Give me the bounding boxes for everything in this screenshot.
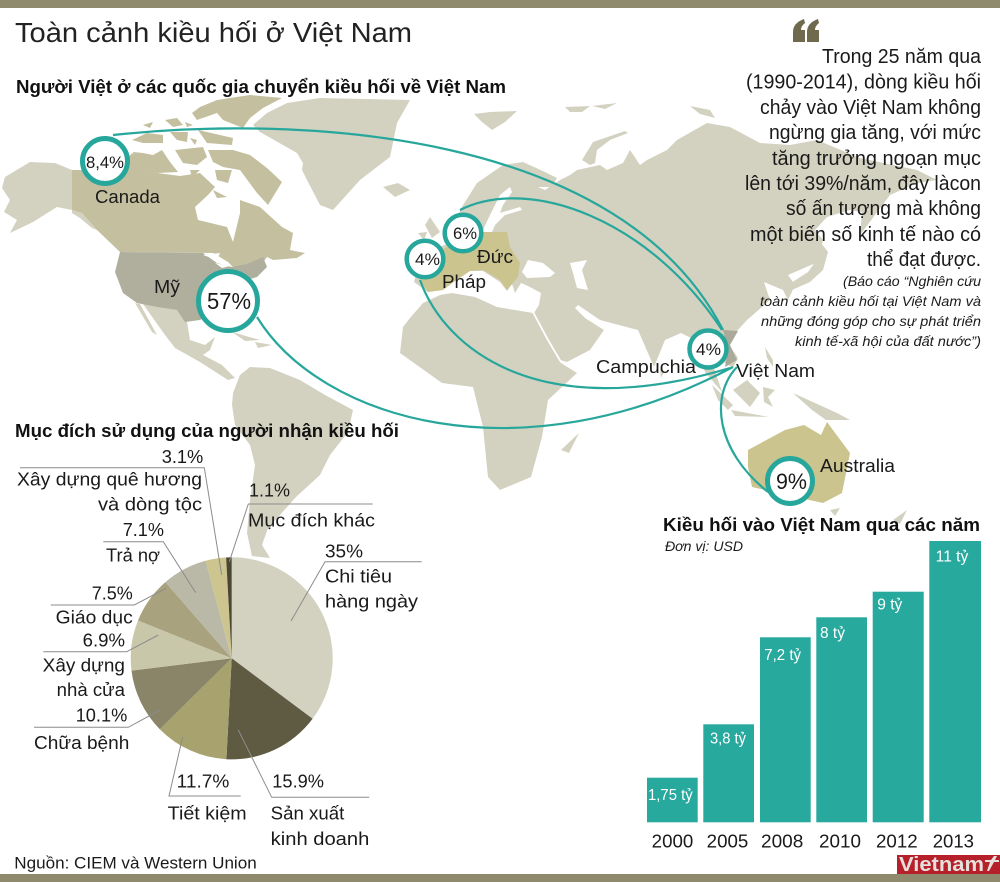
quote source: toàn cảnh kiều hối tại Việt Nam và <box>760 293 981 309</box>
marker: Germany 6% <box>445 215 481 251</box>
marker: Cambodia 4% <box>690 330 726 368</box>
slice: 35% daily spending <box>232 557 333 719</box>
Vietnam highlight <box>723 330 738 367</box>
quote text: một biến số kinh tế nào có <box>750 224 981 246</box>
country labels: Mỹ <box>154 276 181 297</box>
pie labels: 3.1% <box>162 446 203 467</box>
bar chart unit: Đơn vị: USD <box>665 538 743 554</box>
map heading: Người Việt ở các quốc gia chuyển kiều hối về Việt Nam <box>16 77 506 97</box>
pie heading: Mục đích sử dụng của người nhận kiều hối <box>15 421 399 441</box>
marker: Canada 8,4%: 8,4% <box>86 153 124 172</box>
pie leader lines <box>20 468 422 797</box>
quote source: kinh tế-xã hội của đất nước”) <box>795 333 981 349</box>
pie labels: Chữa bệnh <box>34 732 129 753</box>
pie labels: Chi tiêu <box>325 566 392 587</box>
pie labels: 35% <box>325 541 363 562</box>
pie labels: và dòng tộc <box>98 494 202 515</box>
icon: quotation mark <box>793 19 819 42</box>
bar: 2000: 1,75 tỷ <box>648 787 693 804</box>
pie labels: 6.9% <box>83 630 125 651</box>
bar: 2005: 3,8 tỷ <box>710 730 746 747</box>
bar: 2010: 2010 <box>819 830 861 851</box>
quote source <box>760 273 981 349</box>
quote source: (Báo cáo “Nghiên cứu <box>843 273 981 289</box>
marker: France 4%: 4% <box>415 250 440 269</box>
bar: 2005: 2005 <box>707 830 748 851</box>
pie labels: hàng ngày <box>325 591 419 612</box>
marker: Australia 9%: 9% <box>776 469 807 494</box>
flow arcs <box>113 128 768 492</box>
bar: 2010 <box>816 617 867 851</box>
bar: 2008 <box>760 637 811 851</box>
bar: 2013: 2013 <box>933 830 974 851</box>
source line: Nguồn: CIEM và Western Union <box>14 853 257 872</box>
pie labels: nhà cửa <box>57 679 126 700</box>
world map <box>2 95 937 558</box>
pie labels: Mục đích khác <box>248 510 375 531</box>
quote text: lên tới 39%/năm, đây làcon <box>745 173 981 195</box>
France and Germany highlight <box>420 232 520 292</box>
bar: 2005 <box>703 724 754 851</box>
pie chart <box>131 557 333 759</box>
bottom bar <box>0 874 1000 882</box>
pie labels: kinh doanh <box>271 828 369 849</box>
quote text: chảy vào Việt Nam không <box>760 97 981 119</box>
inland seas <box>482 187 588 362</box>
pie labels: Giáo dục <box>56 606 133 627</box>
slice: 6.9% housing <box>131 620 232 671</box>
pie labels <box>17 446 419 849</box>
slice: 1.1% other <box>226 557 232 658</box>
country labels: Pháp <box>442 271 486 292</box>
marker: France 4% <box>407 241 443 277</box>
pie labels: 10.1% <box>76 705 127 726</box>
Australia highlight <box>748 422 850 503</box>
slice: 7.5% education <box>138 582 232 658</box>
bar: 2008: 2008 <box>761 830 803 851</box>
land: rest of the world <box>2 98 937 558</box>
pie labels: 1.1% <box>249 480 290 501</box>
country labels: Campuchia <box>596 356 697 377</box>
quote text: (1990-2014), dòng kiều hối <box>746 72 981 94</box>
quote text: ngừng gia tăng, với mức <box>769 122 981 144</box>
bar chart heading: Kiều hối vào Việt Nam qua các năm <box>663 515 980 535</box>
country labels: Đức <box>477 246 513 267</box>
pie labels: 7.5% <box>92 582 133 603</box>
Canada highlight <box>72 95 305 267</box>
pie labels: Tiết kiệm <box>168 802 247 823</box>
marker: USA 57% <box>198 272 258 330</box>
slice: 10.1% health care <box>132 658 232 729</box>
slice: 3.1% hometown <box>206 558 232 658</box>
bar: 2012 <box>873 592 924 851</box>
country labels: Canada <box>95 186 161 207</box>
quote text: Trong 25 năm qua <box>822 46 982 68</box>
logo: Vietnam+: Vietnam <box>899 854 984 876</box>
pie labels: Sản xuất <box>271 802 344 823</box>
quote text <box>745 46 982 271</box>
title: Toàn cảnh kiều hối ở Việt Nam <box>15 17 412 48</box>
marker: Germany 6%: 6% <box>453 224 477 243</box>
bar: 2010: 8 tỷ <box>820 625 845 642</box>
pie labels: 7.1% <box>123 519 164 540</box>
pie labels: 15.9% <box>272 770 324 791</box>
top bar <box>0 0 1000 8</box>
country labels: Việt Nam <box>736 360 815 381</box>
bar chart <box>647 541 981 851</box>
marker: Cambodia 4%: 4% <box>696 340 721 359</box>
bar: 2013: 11 tỷ <box>936 549 969 566</box>
pie labels: Xây dựng <box>43 655 125 676</box>
quote source: những đóng góp cho sự phát triển <box>761 313 981 329</box>
bar: 2012: 2012 <box>876 830 918 851</box>
bar: 2000: 2000 <box>652 830 693 851</box>
USA highlight <box>115 252 267 322</box>
marker: USA 57%: 57% <box>207 288 251 314</box>
quote text: thể đạt được. <box>867 249 981 271</box>
bar: 2000 <box>647 778 698 851</box>
pie labels: Trả nợ <box>106 545 160 566</box>
Great Lakes <box>203 253 230 268</box>
bar: 2013 <box>929 541 981 851</box>
slice: 15.9% business <box>226 658 313 759</box>
bar: 2012: 9 tỷ <box>877 596 903 613</box>
slice: 11.7% savings <box>160 658 232 759</box>
quote text: tăng trưởng ngoạn mục <box>772 148 981 170</box>
quote text: số ấn tượng mà không <box>786 198 981 220</box>
country labels <box>95 186 896 476</box>
pie labels: Xây dựng quê hương <box>17 469 202 490</box>
slice: 7.1% debt <box>165 561 232 658</box>
bar: 2008: 7,2 tỷ <box>764 647 801 664</box>
marker: Australia 9% <box>768 458 812 504</box>
country labels: Australia <box>820 455 896 476</box>
pie labels: 11.7% <box>177 770 229 791</box>
marker: Canada 8,4% <box>82 138 128 184</box>
